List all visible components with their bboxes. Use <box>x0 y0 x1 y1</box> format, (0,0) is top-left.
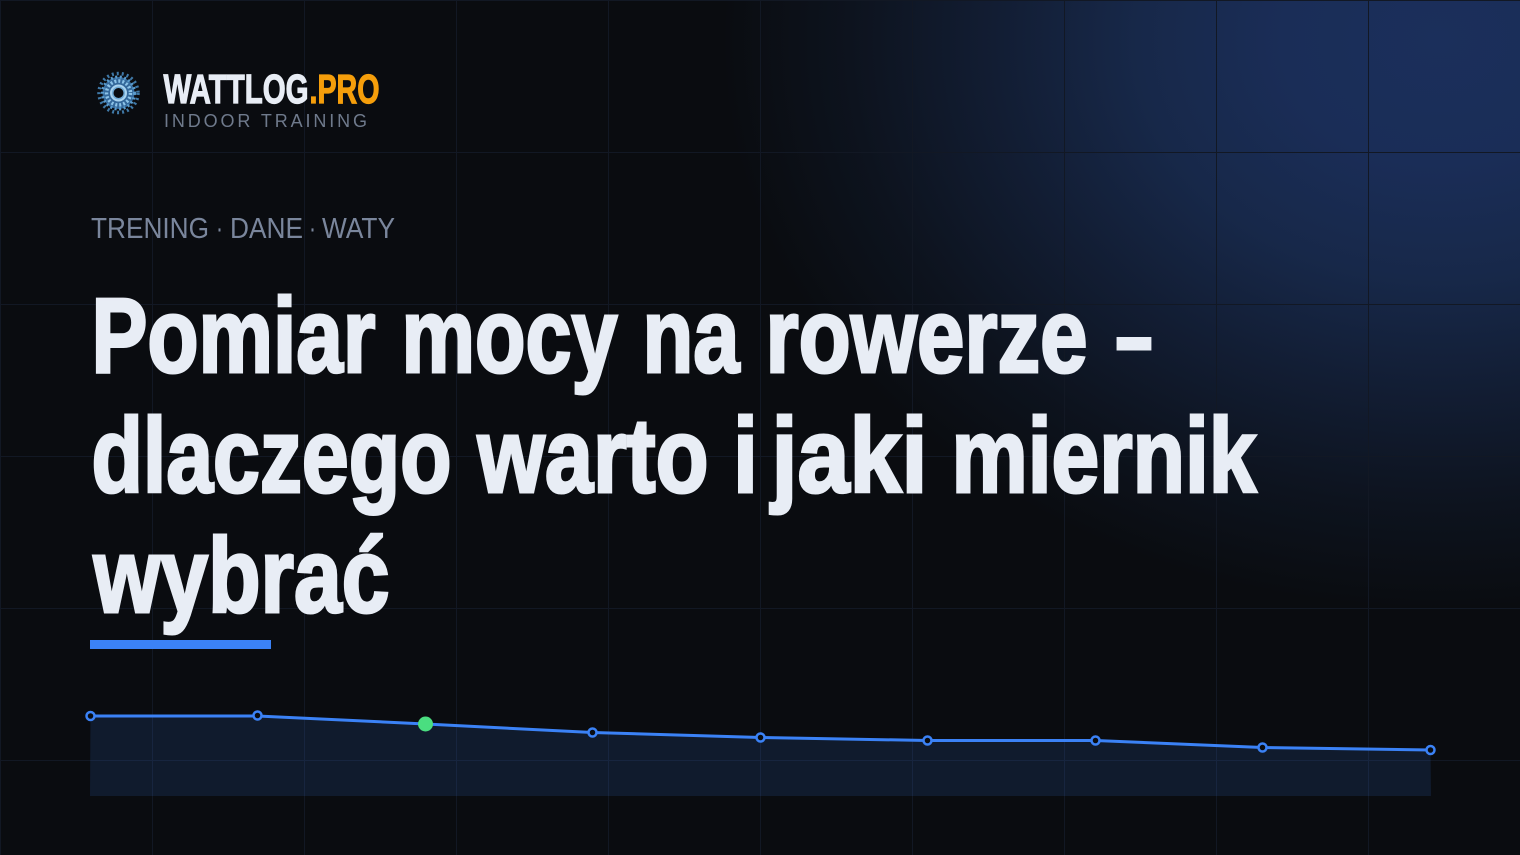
title <box>92 277 1257 635</box>
line chart <box>86 712 1434 796</box>
eyebrow: · <box>216 213 223 245</box>
chart data points <box>86 712 1434 754</box>
highlighted data point <box>418 716 433 732</box>
title: Pomiar <box>92 277 376 395</box>
eyebrow: · <box>309 213 316 245</box>
title: warto <box>477 397 708 515</box>
chart line <box>90 716 1430 750</box>
chart area fill <box>90 716 1431 796</box>
title underline accent <box>90 640 271 649</box>
eyebrow: DANE <box>230 213 303 245</box>
title: i <box>733 397 758 515</box>
eyebrow: TRENING <box>91 213 209 245</box>
title: wybrać <box>93 517 390 635</box>
title: dlaczego <box>92 397 452 515</box>
title: miernik <box>952 397 1257 515</box>
icon: bicycle cassette gear <box>99 74 138 112</box>
eyebrow <box>91 213 395 245</box>
logo <box>99 66 380 131</box>
title: na <box>642 277 740 395</box>
brand name: WATTLOG <box>164 66 308 112</box>
brand tagline: INDOOR TRAINING <box>164 111 367 131</box>
eyebrow: WATY <box>322 213 395 245</box>
title: jaki <box>770 397 928 515</box>
brand name: .PRO <box>310 66 380 112</box>
title: rowerze <box>766 277 1088 395</box>
title: – <box>1116 277 1152 395</box>
title: mocy <box>402 277 618 395</box>
